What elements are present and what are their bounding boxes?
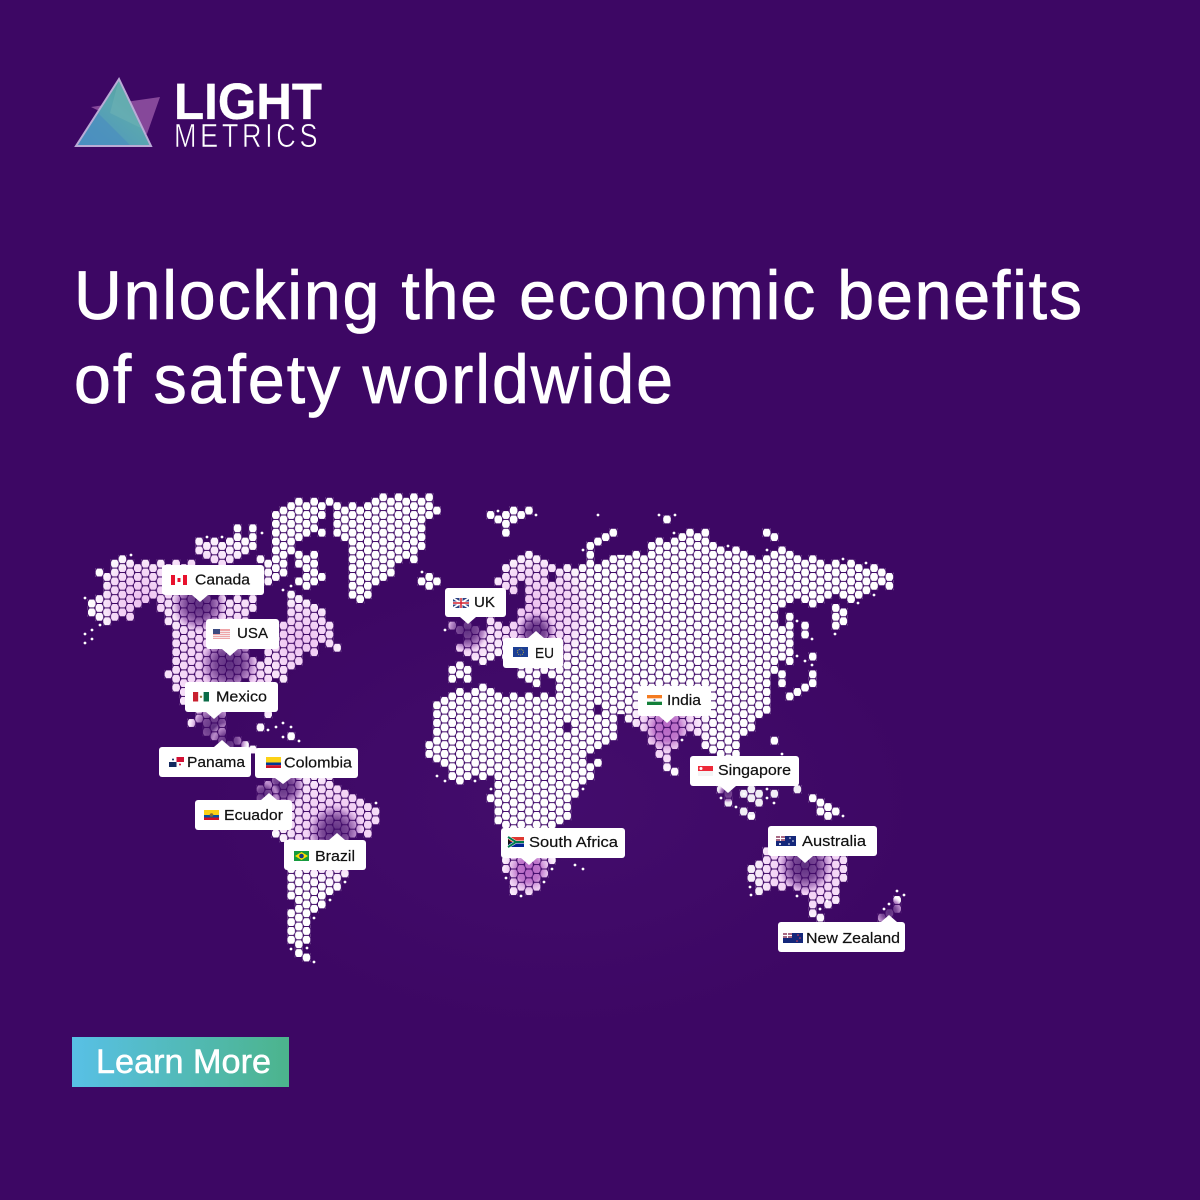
label: EU (503, 631, 563, 668)
label: South Africa (501, 828, 625, 865)
label: Canada (162, 565, 264, 602)
logo: Light Metrics (76, 73, 322, 155)
title: of safety worldwide (74, 342, 673, 418)
label: Panama: Panama (187, 754, 246, 771)
label: Brazil: Brazil (315, 848, 355, 865)
hexagon world map (70, 480, 920, 980)
label: UK: UK (474, 594, 495, 611)
title: Unlocking the economic benefits (74, 258, 1082, 334)
flag: UK (453, 598, 469, 608)
label: Colombia (255, 748, 358, 784)
wordmark: LIGHT (174, 73, 322, 130)
label: India: India (667, 692, 702, 709)
wordmark: METRICS (174, 119, 317, 155)
label: Ecuador (195, 793, 292, 830)
button: Learn More (72, 1037, 289, 1087)
flag: Singapore (698, 766, 713, 776)
label: Panama (159, 740, 251, 777)
flag: Brazil (294, 851, 309, 861)
label: USA: USA (237, 625, 268, 642)
label: New Zealand: New Zealand (806, 930, 900, 947)
label: UK (445, 588, 506, 624)
flag: EU (513, 647, 528, 657)
button: Learn More: Learn More (96, 1043, 271, 1081)
label: Mexico: Mexico (216, 688, 267, 706)
flag: Australia (776, 836, 796, 846)
flag: Mexico (193, 692, 209, 702)
flag: New Zealand (783, 933, 803, 943)
flag: Ecuador (204, 810, 219, 820)
wordmark (174, 73, 322, 155)
flag: India (647, 695, 662, 705)
label: New Zealand (778, 915, 905, 952)
label: Singapore (690, 756, 799, 793)
flag: Panama (169, 757, 184, 767)
label: Ecuador: Ecuador (224, 807, 283, 824)
label: South Africa: South Africa (529, 834, 619, 851)
flag: South Africa (508, 837, 524, 847)
label: Australia (768, 826, 877, 863)
label: EU: EU (535, 645, 554, 662)
label: Singapore: Singapore (718, 762, 791, 779)
title (74, 258, 1082, 418)
label: Brazil (284, 833, 366, 870)
label: India (638, 686, 711, 723)
label: USA (206, 619, 279, 656)
flag: Canada (171, 575, 187, 585)
icon: logo triangle (76, 79, 160, 146)
flag: Colombia (266, 757, 281, 768)
label: Colombia: Colombia (284, 754, 353, 772)
flag: USA (213, 629, 230, 639)
label: Canada: Canada (195, 572, 251, 588)
label: Australia: Australia (802, 833, 867, 850)
label: Mexico (185, 682, 278, 719)
